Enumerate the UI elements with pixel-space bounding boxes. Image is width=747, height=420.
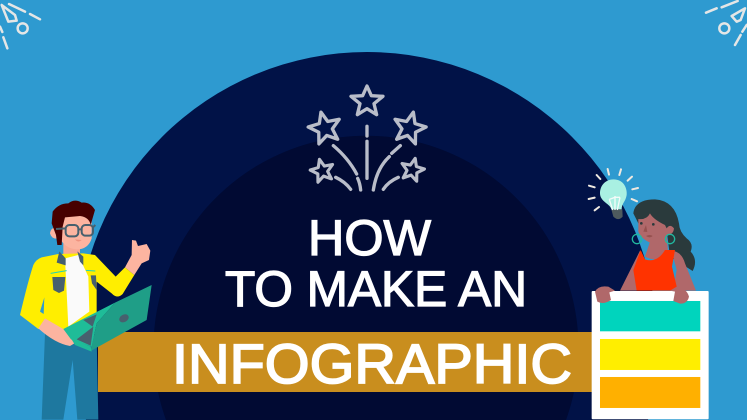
hair [52,201,95,245]
character: man with laptop [20,201,152,420]
lightbulb rays [589,169,638,210]
raised hand with thumb up [125,240,150,275]
jeans [42,333,98,420]
banner [98,332,594,392]
heading: infographic: INFOGRAPHIC [172,332,572,395]
head [50,213,92,249]
red top [633,250,678,291]
forearm [38,318,83,346]
laptop [63,285,152,352]
earrings [632,234,675,244]
icon: top right corner firework [706,1,747,45]
jacket [20,253,134,330]
eyes [640,222,643,225]
hair [633,199,695,271]
icon: fireworks with stars [305,86,429,190]
heading: how: HOW [308,210,432,266]
outer dark circle [77,52,657,420]
heading: to make an: TO MAKE AN [225,261,527,317]
face [638,213,674,244]
jacket stripes [51,270,95,273]
jacket slit [40,297,44,314]
nose and mouth [75,239,82,242]
board [592,291,709,419]
inner dark circle [154,136,578,420]
character: woman with lightbulb and board [589,169,709,419]
neck [645,237,668,260]
arms and shoulders [620,251,696,291]
icon: top left corner firework [0,4,40,48]
nose and lips [643,225,653,237]
jacket collar and pockets [52,251,97,293]
neck [63,243,80,260]
white shirt [65,255,89,327]
hands [595,286,615,303]
lightbulb [600,179,627,219]
glasses [56,225,95,236]
